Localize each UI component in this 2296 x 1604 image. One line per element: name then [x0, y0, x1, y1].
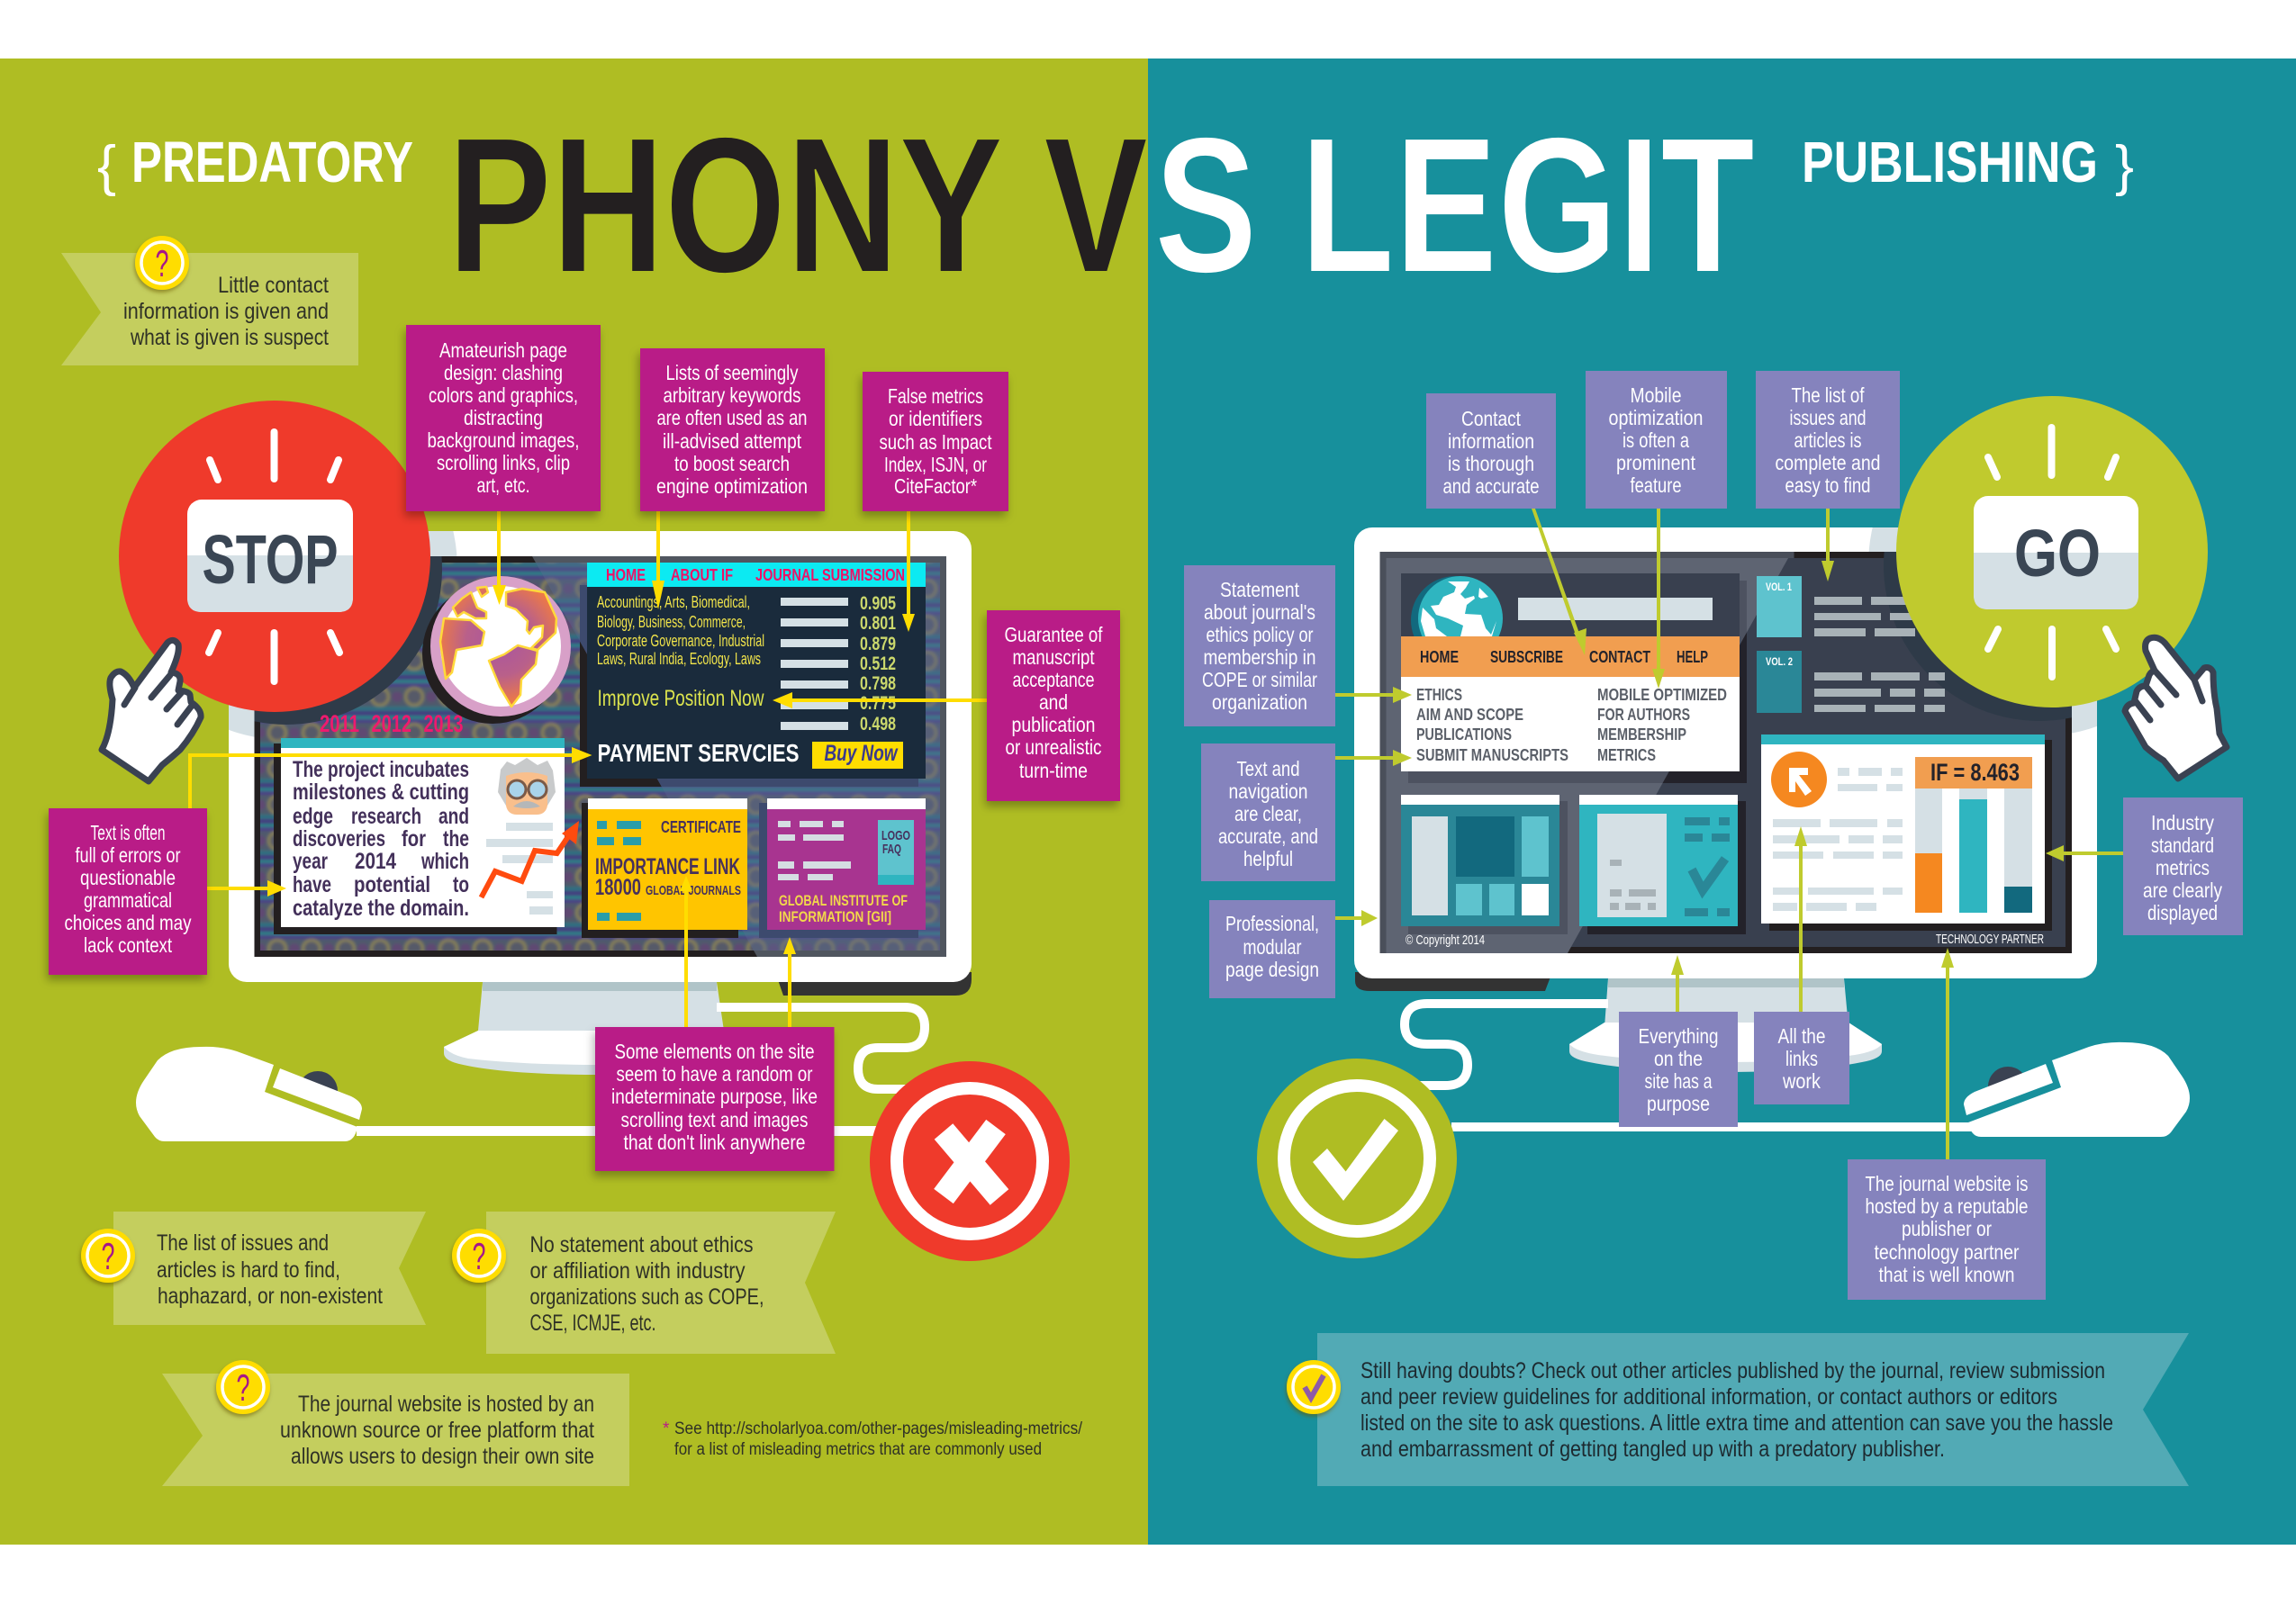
callout: industry metrics — [2123, 797, 2243, 935]
callout: errors in text: lack context — [84, 933, 172, 957]
callout: errors in text: choices and may — [65, 911, 192, 934]
keyword and metrics panel: 0.775 — [860, 693, 896, 714]
callout: random elements: that don't link anywhere — [623, 1131, 805, 1154]
keyword and metrics panel: HOME — [606, 566, 646, 584]
keyword and metrics panel: Improve Position Now — [598, 686, 764, 711]
callout: arbitrary keywords: to boost search — [674, 452, 790, 475]
callout: reputable host: that is well known — [1878, 1263, 2015, 1286]
callout banner: unknown source host: allows users to design their own site — [291, 1444, 594, 1469]
heading: publishing: PUBLISHING — [1802, 130, 2098, 194]
callout: clear navigation: are clear, — [1234, 802, 1302, 825]
modular card 2 — [1579, 795, 1746, 934]
callout banner: little contact — [61, 236, 358, 365]
years label — [320, 710, 463, 737]
callout: amateurish page design: art, etc. — [477, 473, 529, 497]
article panel: 2014 — [355, 849, 396, 874]
callout banner: no ethics statement: CSE, ICMJE, etc. — [529, 1311, 655, 1336]
callout: everything has purpose: site has a — [1644, 1069, 1713, 1093]
cable: left mouse cord — [357, 1126, 879, 1136]
cable: right mouse — [1405, 1004, 1608, 1086]
article panel: milestones & cutting — [293, 779, 469, 805]
callout: errors in text: questionable — [80, 866, 176, 889]
callout: industry metrics: displayed — [2147, 901, 2218, 924]
cable: right mouse cord — [1451, 1122, 1974, 1131]
callout banner: little contact: ? — [155, 242, 169, 284]
callout: mobile optimization: is often a — [1623, 428, 1689, 452]
article panel: discoveries — [293, 826, 385, 852]
callout: reputable host — [1848, 1159, 2046, 1300]
callout banner: list of issues hard to find: The list of issues and — [157, 1230, 329, 1256]
certificate card — [582, 798, 747, 938]
volume 1 and 2 list — [1757, 576, 1945, 713]
callout: everything has purpose — [1619, 1012, 1738, 1127]
callout: arbitrary keywords: are often used as an — [657, 406, 807, 429]
footnote: for a list of misleading metrics that are commonly used — [674, 1440, 1042, 1459]
stop sign circle: STOP — [202, 521, 339, 599]
article panel: research — [351, 804, 421, 829]
callout: errors in text — [49, 808, 207, 975]
callout: list of issues complete: The list of — [1792, 383, 1865, 407]
callout banner: no ethics statement: or affiliation with industry — [529, 1258, 746, 1284]
metrics panel with impact factor: IF = 8.463 — [1930, 759, 2020, 786]
heading: predatory: PREDATORY — [131, 130, 413, 194]
callout: amateurish page design: distracting — [464, 406, 543, 429]
keyword and metrics panel: 0.905 — [860, 593, 896, 614]
callout: false metrics: or identifiers — [889, 407, 982, 430]
callout: everything has purpose: purpose — [1647, 1092, 1710, 1115]
callout: contact information: information — [1448, 429, 1534, 453]
callout: guarantee of acceptance: manuscript — [1012, 645, 1095, 669]
callout: clear navigation — [1201, 743, 1335, 881]
stop sign circle — [119, 401, 430, 712]
keyword and metrics panel: 0.498 — [860, 714, 896, 734]
keyword and metrics panel: Corporate Governance, Industrial — [597, 632, 764, 650]
icon: pointing hand left — [102, 640, 201, 781]
callout: reputable host: publisher or — [1902, 1217, 1992, 1240]
go sign circle: GO — [2014, 516, 2101, 590]
icon: professor avatar — [498, 758, 556, 815]
callout: industry metrics: metrics — [2156, 856, 2210, 879]
callout banner: no ethics statement: No statement about ethics — [529, 1232, 753, 1257]
institute card — [759, 798, 926, 938]
callout: arbitrary keywords — [640, 348, 825, 511]
certificate card: 18000 — [595, 875, 641, 900]
header panel with navigation: METRICS — [1597, 746, 1656, 764]
callout: random elements: scrolling text and images — [621, 1108, 809, 1131]
footnote: See http://scholarlyoa.com/other-pages/misleading-metrics/ — [674, 1419, 1083, 1438]
monitor: legit site — [1354, 527, 2097, 1072]
article panel: potential — [354, 872, 430, 897]
callout banner: little contact: what is given is suspect — [130, 325, 329, 350]
monitor: legit site: TECHNOLOGY PARTNER — [1936, 932, 2044, 947]
metrics panel with impact factor — [1761, 734, 2052, 931]
callout banner: list of issues hard to find: articles is hard to find, — [157, 1257, 340, 1283]
callout: ethics statement: COPE or similar — [1202, 668, 1317, 691]
callout: mobile optimization: optimization — [1608, 406, 1704, 429]
keyword and metrics panel: 0.512 — [860, 653, 896, 674]
x mark circle — [870, 1061, 1070, 1261]
check mark circle — [1257, 1059, 1457, 1258]
callout: mobile optimization: feature — [1630, 473, 1682, 497]
callout: clear navigation: navigation — [1228, 779, 1307, 803]
callout: guarantee of acceptance: turn-time — [1019, 759, 1088, 782]
heading: publishing: } — [2115, 135, 2134, 197]
title: phony vs legit: S LEGIT — [1154, 96, 1755, 313]
callout: mobile optimization — [1586, 371, 1727, 509]
keyword and metrics panel: 0.879 — [860, 634, 896, 654]
header panel with navigation: MEMBERSHIP — [1597, 725, 1686, 743]
header panel with navigation: SUBMIT MANUSCRIPTS — [1416, 746, 1568, 764]
callout: ethics statement: membership in — [1203, 645, 1316, 669]
title: phony vs legit — [447, 96, 1755, 313]
institute card: INFORMATION [GII] — [779, 908, 891, 925]
callout: guarantee of acceptance: or unrealistic — [1005, 735, 1102, 759]
header panel with navigation: CONTACT — [1589, 648, 1650, 666]
callout: mobile optimization: Mobile — [1630, 383, 1682, 407]
article panel: have — [293, 872, 331, 897]
callout: arbitrary keywords: Lists of seemingly — [666, 361, 799, 384]
callout: professional design — [1209, 900, 1335, 998]
volume 1 and 2 list: VOL. 1 — [1766, 581, 1792, 593]
callout: reputable host: hosted by a reputable — [1866, 1194, 2028, 1218]
callout: amateurish page design: background images, — [427, 428, 580, 452]
certificate card: GLOBAL JOURNALS — [646, 883, 741, 898]
callout banner: still having doubts: listed on the site to ask questions. A little extra time and attention can save you the hassle — [1360, 1410, 2113, 1436]
callout: errors in text: full of errors or — [76, 843, 181, 867]
callout banner: still having doubts — [1287, 1333, 2189, 1486]
keyword and metrics panel: 0.801 — [860, 613, 896, 634]
header panel with navigation: SUBSCRIBE — [1490, 648, 1563, 666]
callout: false metrics — [863, 372, 1008, 511]
callout: guarantee of acceptance: and — [1039, 690, 1068, 714]
article panel: which — [420, 849, 469, 874]
callout: false metrics: such as Impact — [879, 430, 992, 454]
keyword and metrics panel: Biology, Business, Commerce, — [597, 613, 746, 631]
keyword and metrics panel: Accountings, Arts, Biomedical, — [597, 593, 750, 611]
keyword and metrics panel: JOURNAL SUBMISSION — [755, 566, 905, 584]
background: predatory side — [0, 59, 1148, 1545]
callout: random elements: Some elements on the site — [614, 1040, 814, 1063]
callout: professional design: page design — [1225, 958, 1319, 981]
callout: amateurish page design — [406, 325, 601, 511]
cable: left mouse — [717, 1007, 925, 1089]
years label: 2012 — [371, 710, 411, 737]
callout: all links work: links — [1785, 1047, 1818, 1070]
callout: amateurish page design: Amateurish page — [439, 338, 567, 362]
keyword and metrics panel: PAYMENT SERVCIES — [598, 739, 800, 767]
callout: reputable host: technology partner — [1875, 1240, 2020, 1264]
header panel with navigation: HELP — [1677, 648, 1708, 666]
callout: random elements: indeterminate purpose, like — [611, 1085, 818, 1108]
callout: random elements: seem to have a random or — [616, 1062, 813, 1086]
callout: mobile optimization: prominent — [1616, 451, 1696, 474]
article panel: edge — [293, 804, 333, 829]
icon: zigzag arrow — [481, 821, 579, 897]
callout banner: unknown source host: unknown source or free platform that — [280, 1418, 594, 1443]
arrows: legit site — [1335, 509, 2123, 1159]
years label: 2011 — [320, 710, 359, 737]
callout: industry metrics: Industry — [2151, 811, 2214, 834]
callout: false metrics: False metrics — [888, 384, 983, 408]
article panel: and — [438, 804, 469, 829]
institute card: FAQ — [882, 842, 901, 857]
icon: left mouse — [136, 1047, 362, 1141]
modular card 1 — [1401, 795, 1568, 934]
callout: industry metrics: standard — [2151, 834, 2214, 857]
footnote — [663, 1419, 1083, 1459]
callout: arbitrary keywords: ill-advised attempt — [663, 429, 802, 453]
background: legit side — [1148, 59, 2296, 1545]
certificate card: CERTIFICATE — [661, 818, 741, 836]
monitor: predatory site — [229, 531, 972, 1075]
icon: orange arrow — [1771, 752, 1827, 807]
callout banner: unknown source host — [162, 1360, 629, 1486]
callout banner: list of issues hard to find: ? — [101, 1235, 115, 1277]
icon: teal globe — [1411, 576, 1503, 636]
years label: 2013 — [423, 710, 463, 737]
article panel: year — [293, 849, 328, 874]
callout banner: unknown source host: ? — [236, 1366, 250, 1409]
institute card: GLOBAL INSTITUTE OF — [779, 892, 908, 909]
header panel with navigation — [1401, 573, 1747, 783]
callout: errors in text: grammatical — [84, 888, 172, 912]
callout banner: still having doubts: and embarrassment of getting tangled up with a predatory publisher. — [1360, 1437, 1945, 1462]
header panel with navigation: MOBILE OPTIMIZED — [1597, 686, 1727, 704]
article panel: for — [402, 826, 426, 852]
institute card: LOGO — [881, 828, 910, 843]
article panel: catalyze the domain. — [293, 896, 469, 921]
callout: contact information: is thorough — [1448, 452, 1534, 475]
callout: reputable host: The journal website is — [1866, 1172, 2028, 1195]
monitor: legit site: © Copyright 2014 — [1406, 933, 1485, 948]
volume 1 and 2 list: VOL. 2 — [1766, 655, 1793, 668]
callout: ethics statement: Statement — [1220, 578, 1300, 601]
callout: guarantee of acceptance: acceptance — [1012, 668, 1095, 691]
callout: false metrics: Index, ISJN, or — [884, 453, 987, 476]
heading: predatory: { — [97, 135, 116, 197]
title: phony vs legit: PHONY V — [447, 96, 1148, 313]
callout: guarantee of acceptance: publication — [1012, 713, 1095, 736]
globe with clashing colors — [422, 576, 571, 724]
callout: industry metrics: are clearly — [2143, 879, 2222, 902]
callout: ethics statement: organization — [1212, 690, 1307, 714]
callout banner: no ethics statement: ? — [472, 1235, 486, 1277]
callout banner: no ethics statement: organizations such as COPE, — [529, 1284, 764, 1310]
callout: professional design: modular — [1243, 935, 1302, 959]
callout: list of issues complete: easy to find — [1785, 473, 1871, 497]
callout: arbitrary keywords: arbitrary keywords — [663, 383, 801, 407]
callout: ethics statement: about journal's — [1204, 600, 1315, 624]
callout: all links work: All the — [1777, 1024, 1826, 1048]
callout banner: little contact: Little contact — [218, 273, 329, 298]
callout: contact information — [1426, 393, 1556, 509]
keyword and metrics panel: Buy Now — [825, 741, 899, 766]
callout banner: list of issues hard to find: haphazard, or non-existent — [158, 1284, 383, 1309]
callout banner: still having doubts: and peer review guidelines for additional information, or contact authors or editors — [1360, 1384, 2057, 1410]
icon: pointing hand right — [2125, 637, 2227, 779]
callout: guarantee of acceptance: Guarantee of — [1005, 623, 1103, 646]
callout banner: still having doubts: Still having doubts? Check out other articles published by the journal, review submission — [1360, 1358, 2105, 1383]
header panel with navigation: ETHICS — [1416, 686, 1462, 704]
callout: guarantee of acceptance — [987, 610, 1120, 801]
callout banner: list of issues hard to find — [81, 1212, 426, 1325]
header panel with navigation: AIM AND SCOPE — [1416, 706, 1523, 724]
header panel with navigation: HOME — [1420, 648, 1459, 666]
callout: amateurish page design: design: clashing — [444, 361, 563, 384]
callout: all links work — [1754, 1012, 1849, 1104]
keyword and metrics panel: 0.798 — [860, 673, 896, 694]
callout: random elements — [595, 1027, 834, 1171]
callout: amateurish page design: scrolling links, clip — [437, 451, 570, 474]
callout banner: little contact: information is given and — [123, 299, 329, 324]
footnote: * — [663, 1419, 670, 1438]
go sign circle — [1896, 396, 2208, 707]
callout: ethics statement: ethics policy or — [1207, 623, 1314, 646]
header panel with navigation: FOR AUTHORS — [1597, 706, 1690, 724]
keyword and metrics panel — [580, 563, 926, 787]
callout: professional design: Professional, — [1225, 912, 1319, 935]
keyword and metrics panel: ABOUT IF — [671, 566, 733, 584]
callout banner: unknown source host: The journal website is hosted by an — [298, 1392, 594, 1417]
arrows: predatory site — [188, 511, 987, 1027]
callout: ethics statement — [1184, 565, 1335, 726]
callout: list of issues complete — [1756, 371, 1900, 509]
callout: errors in text: Text is often — [90, 821, 166, 844]
callout: contact information: and accurate — [1442, 474, 1540, 498]
callout: clear navigation: accurate, and — [1218, 825, 1318, 848]
callout: list of issues complete: issues and — [1790, 406, 1866, 429]
keyword and metrics panel: Laws, Rural India, Ecology, Laws — [597, 650, 761, 668]
callout: false metrics: CiteFactor* — [894, 474, 977, 498]
article panel: to — [453, 872, 469, 897]
callout: all links work: work — [1782, 1069, 1821, 1093]
article panel: The project incubates — [293, 757, 469, 782]
callout: amateurish page design: colors and graphics, — [429, 383, 578, 407]
callout: everything has purpose: on the — [1654, 1047, 1703, 1070]
header panel with navigation: PUBLICATIONS — [1416, 725, 1512, 743]
callout: arbitrary keywords: engine optimization — [656, 474, 808, 498]
callout banner: no ethics statement — [452, 1212, 836, 1354]
callout: clear navigation: helpful — [1243, 847, 1293, 870]
article panel: the — [443, 826, 469, 852]
certificate card: IMPORTANCE LINK — [595, 854, 740, 879]
callout: contact information: Contact — [1461, 407, 1522, 430]
icon: right mouse — [1964, 1042, 2190, 1137]
callout: everything has purpose: Everything — [1639, 1024, 1718, 1048]
callout: list of issues complete: articles is — [1794, 428, 1862, 452]
article panel — [274, 738, 565, 934]
callout: clear navigation: Text and — [1237, 757, 1300, 780]
callout: list of issues complete: complete and — [1776, 451, 1880, 474]
